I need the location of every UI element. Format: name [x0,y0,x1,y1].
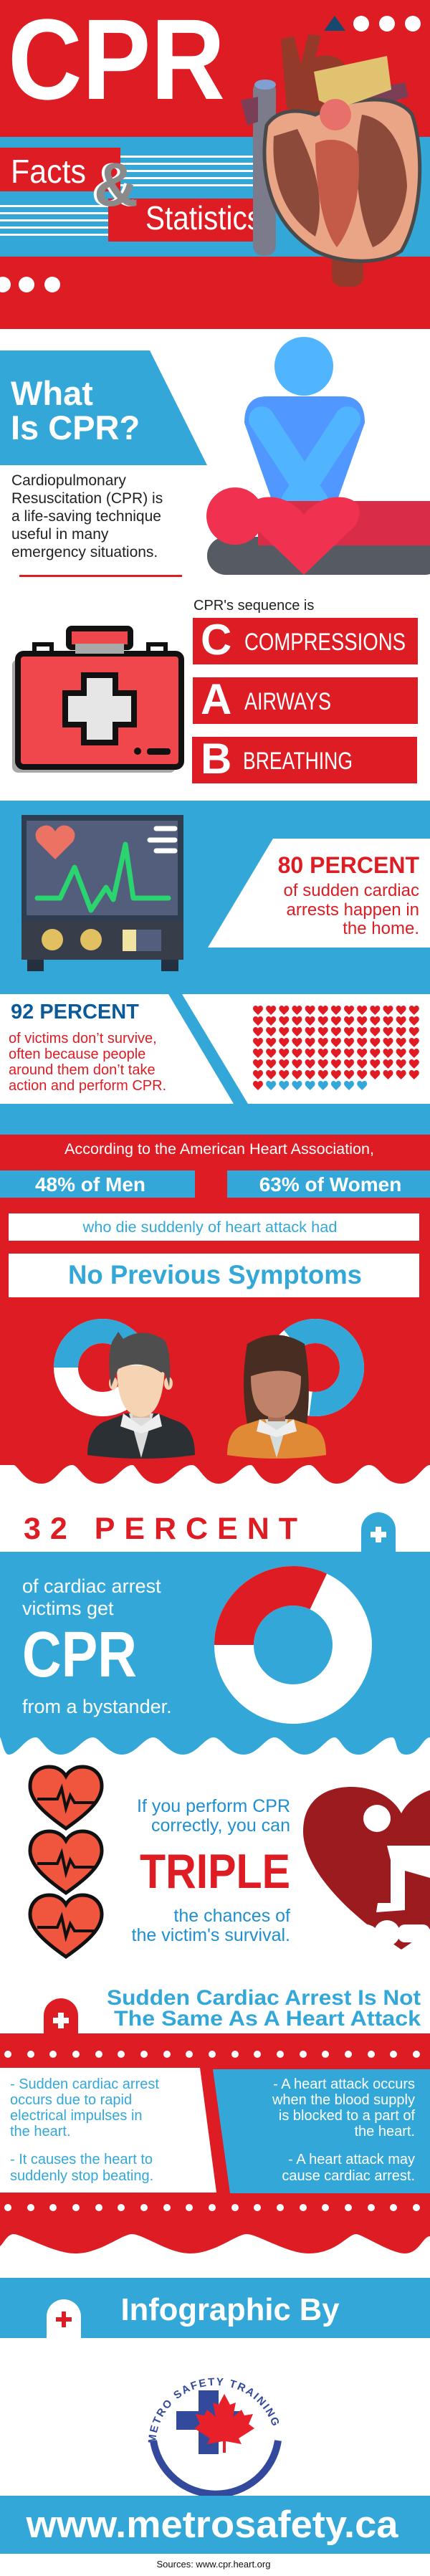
callout: 92 percent: around them don’t take [9,1062,156,1078]
heading: no previous symptoms [9,1254,419,1297]
stat: 48% of men [0,1170,195,1198]
icon: triangle and dots [324,16,421,32]
C compressions: C [201,616,231,664]
text: heart attack [213,2069,430,2193]
text: heart attack: is blocked to a part of [279,2108,415,2124]
text: definition [11,472,163,560]
text: triple survival: correctly, you can [151,1816,290,1836]
text: heart attack: cause cardiac arrest. [282,2168,415,2184]
panel: what is CPR [0,337,430,577]
heading: What Is CPR?: What [11,374,93,412]
text: sudden cardiac arrest: - It causes the heart to [10,2152,153,2167]
icon: heart monitor [22,815,183,971]
heading: What Is CPR?: Is CPR? [11,409,140,447]
A airways [193,675,418,724]
chart: men donut [66,1331,139,1404]
subtitle: Statistics [108,199,267,242]
illustration: CPR rescuer [206,337,430,575]
heading: SCA vs heart attack [107,1986,421,2031]
panel: CPR sequence [12,598,418,783]
stat: 63% of women [227,1170,430,1198]
text: triple survival: the chances of [173,1906,290,1926]
chart: 100 hearts [182,994,430,1104]
banner: infographic by: Infographic By [120,2292,340,2327]
text: triple survival [132,1796,290,1945]
panel: no previous symptoms: According to the American Heart Association, [64,1141,374,1158]
text: definition: emergency situations. [11,544,158,560]
C compressions [193,616,418,664]
callout: 92 percent: of victims don’t survive, [9,1031,157,1046]
callout: 80 percent [208,839,430,948]
heading: no previous symptoms: No Previous Symptoms [68,1260,362,1289]
icon: CPR heart [303,1787,430,1950]
text: triple survival: the victim's survival. [132,1925,290,1945]
subtitle: Statistics: Statistics [145,199,262,237]
banner: website [0,2496,430,2554]
subtitle: Facts: Facts [11,153,86,190]
icon: woman [227,1335,326,1459]
callout: 92 percent: action and perform CPR. [9,1078,166,1094]
callout: 92 percent: often because people [9,1046,145,1062]
panel: bystander CPR: from a bystander. [22,1696,172,1717]
icon: three hearts [30,1767,102,1957]
text: definition: a life-saving technique [11,508,161,525]
heading: SCA vs heart attack: The Same As A Heart Attack [114,2007,421,2031]
stat: 48% of men: 48% of Men [35,1173,145,1196]
callout: 80 percent: of sudden cardiac [284,881,419,900]
callout: 92 percent: 92 PERCENT [11,1001,139,1024]
panel: CPR sequence: CPR's sequence is [194,598,314,614]
ampersand: & [91,151,135,219]
callout: 80 percent: arrests happen in [287,900,419,920]
text: sudden cardiac arrest [0,2068,216,2193]
icon: first aid kit [12,629,181,773]
A airways: AIRWAYS [244,688,331,715]
icon: blue tab with cross [361,1512,396,1552]
callout: 92 percent [0,994,234,1104]
text: definition: useful in many [11,526,109,543]
text: heart attack: the heart. [354,2124,415,2139]
dots bottom left [0,277,60,292]
text: definition: Cardiopulmonary [11,472,126,489]
heading: 32 percent [24,1512,396,1552]
logo: metro safety training: METRO SAFETY TRAINING [148,2378,279,2443]
panel: no previous symptoms: who die suddenly of heart attack had [82,1219,337,1236]
illustration: anatomical heart [241,34,420,287]
panel: bystander CPR [0,1552,430,1755]
banner: website: www.metrosafety.ca [25,2504,398,2546]
text: heart attack: - A heart attack occurs [273,2076,415,2092]
panel: home statistics [0,801,430,1135]
callout: 80 percent: 80 PERCENT [278,852,419,878]
subtitle: Facts [0,148,120,191]
ampersand: & [94,151,138,219]
panel: bystander CPR: victims get [22,1598,114,1619]
text: sudden cardiac arrest: electrical impulses in [10,2108,143,2124]
text: sudden cardiac arrest: occurs due to rapid [10,2092,132,2108]
text: definition: Resuscitation (CPR) is [11,490,163,507]
chart: 32 percent donut [234,1585,353,1704]
heading: 32 percent: 32 PERCENT [24,1512,297,1546]
icon: man [87,1332,195,1459]
text: sudden cardiac arrest: the heart. [10,2124,71,2139]
panel: bystander CPR: CPR [22,1619,137,1691]
panel: no previous symptoms [0,1135,430,1484]
text: triple survival: If you perform CPR [137,1796,290,1816]
logo: metro safety training [148,2378,282,2496]
heading: SCA vs heart attack: Sudden Cardiac Arrest Is Not [107,1986,421,2010]
panel: comparison [0,2033,430,2253]
text: sudden cardiac arrest: - Sudden cardiac arrest [10,2076,159,2092]
text: sudden cardiac arrest: suddenly stop beating. [10,2168,153,2184]
text: triple survival: TRIPLE [140,1844,290,1899]
A airways: A [201,675,231,723]
B breathing: BREATHING [243,748,353,775]
text: heart attack: when the blood supply [272,2092,415,2108]
callout: 80 percent: the home. [343,919,419,938]
text: heart attack: - A heart attack may [288,2152,415,2167]
icon: red tab with cross [44,1998,78,2034]
chart: women donut [264,1316,367,1419]
panel: bystander CPR: of cardiac arrest [22,1575,161,1597]
header panel [0,0,430,329]
B breathing: B [201,735,231,783]
stat: 63% of women: 63% of Women [259,1173,401,1196]
banner: infographic by [0,2278,430,2339]
text: sources: Sources: www.cpr.heart.org [157,2559,270,2570]
heading: What Is CPR? [11,374,140,447]
B breathing [192,735,417,783]
